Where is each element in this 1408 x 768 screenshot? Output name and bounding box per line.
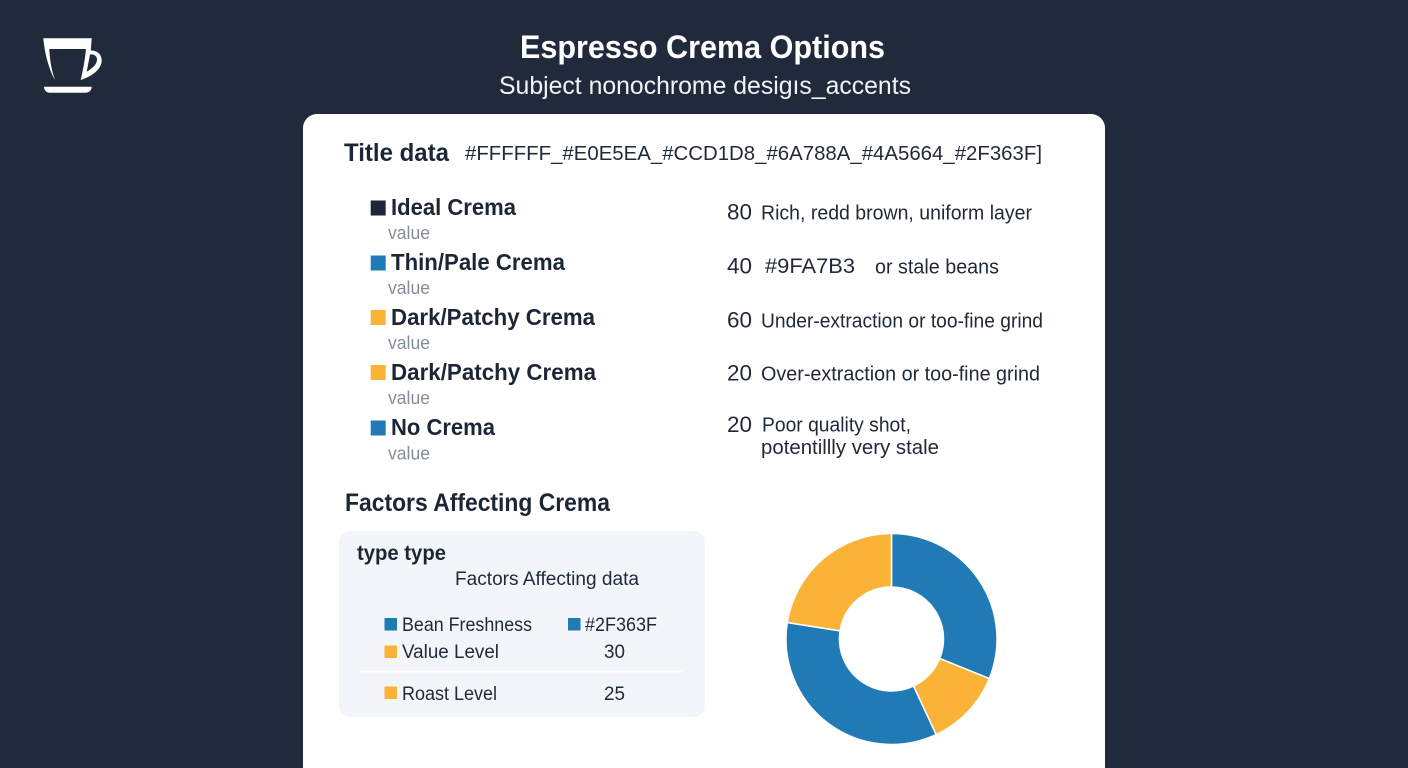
- row: bean freshness: Bean Freshness: [402, 615, 532, 636]
- row: 20 second: Poor quality shot,: [762, 414, 911, 436]
- item: no crema: value: [388, 444, 430, 464]
- table subtitle: Factors Affecting data: [455, 569, 639, 590]
- item: no crema: No Crema: [391, 414, 496, 440]
- row: 60: Under-extraction or too-fine grind: [761, 310, 1043, 332]
- row: 20 second: 20: [727, 412, 752, 437]
- row: value level: 30: [604, 642, 625, 663]
- text: colour codes: #FFFFFF_#E0E5EA_#CCD1D8_#6A788A_#4A5664_#2F363F]: [465, 142, 1042, 165]
- row: 40: or stale beans: [875, 256, 999, 278]
- item: dark/patchy crema repeat: [371, 359, 597, 408]
- item: dark/patchy crema repeat: Dark/Patchy Crema: [391, 359, 597, 385]
- item: ideal crema: value: [388, 223, 430, 243]
- crema descriptions: [727, 200, 1043, 459]
- row: bean freshness: [384, 615, 657, 636]
- item: dark/patchy crema: Dark/Patchy Crema: [391, 304, 596, 330]
- icon: coffee cup: [43, 38, 102, 93]
- item: dark/patchy crema: [371, 304, 596, 353]
- table heading: type type: [357, 542, 446, 565]
- row: 20: 20: [727, 360, 752, 386]
- donut chart: [786, 534, 997, 744]
- slice: orange lower right: [914, 658, 989, 735]
- heading: title data: Title data: [344, 139, 450, 167]
- subtitle: Subject nonochrome desigıs_accents: [499, 72, 911, 100]
- row: roast level: 25: [604, 684, 625, 705]
- row: 20 second: potentillly very stale: [761, 436, 939, 459]
- item: dark/patchy crema: value: [388, 333, 430, 353]
- crema list: [371, 194, 597, 464]
- row: 40: 40: [727, 254, 752, 278]
- row: value level: [384, 642, 625, 663]
- panel: main card: [303, 114, 1105, 768]
- slice: blue lower left: [786, 622, 936, 744]
- row: 60: 60: [727, 308, 752, 332]
- item: ideal crema: [371, 194, 517, 243]
- panel: factors table: [339, 531, 705, 717]
- row: bean freshness: #2F363F: [585, 615, 657, 636]
- slice: orange upper left: [787, 534, 892, 631]
- item: ideal crema: Ideal Crema: [391, 194, 517, 220]
- row: 40: #9FA7B3: [765, 255, 855, 278]
- row: 40: [727, 254, 999, 278]
- row: 80: 80: [727, 200, 752, 224]
- item: no crema: [371, 414, 496, 464]
- row: 20 second: [727, 412, 939, 459]
- item: thin/pale crema: [371, 249, 566, 298]
- row: roast level: Roast Level: [402, 684, 497, 705]
- row: value level: Value Level: [402, 642, 499, 663]
- item: thin/pale crema: Thin/Pale Crema: [391, 249, 566, 275]
- row: roast level: [384, 684, 625, 705]
- row: 80: Rich, redd brown, uniform layer: [761, 202, 1032, 224]
- item: dark/patchy crema repeat: value: [388, 388, 430, 408]
- item: thin/pale crema: value: [388, 278, 430, 298]
- heading: factors affecting crema: Factors Affecting Crema: [345, 489, 611, 517]
- row: 20: Over-extraction or too-fine grind: [761, 362, 1040, 386]
- slice: blue upper right: [892, 534, 997, 679]
- title: Espresso Crema Options: [520, 29, 885, 65]
